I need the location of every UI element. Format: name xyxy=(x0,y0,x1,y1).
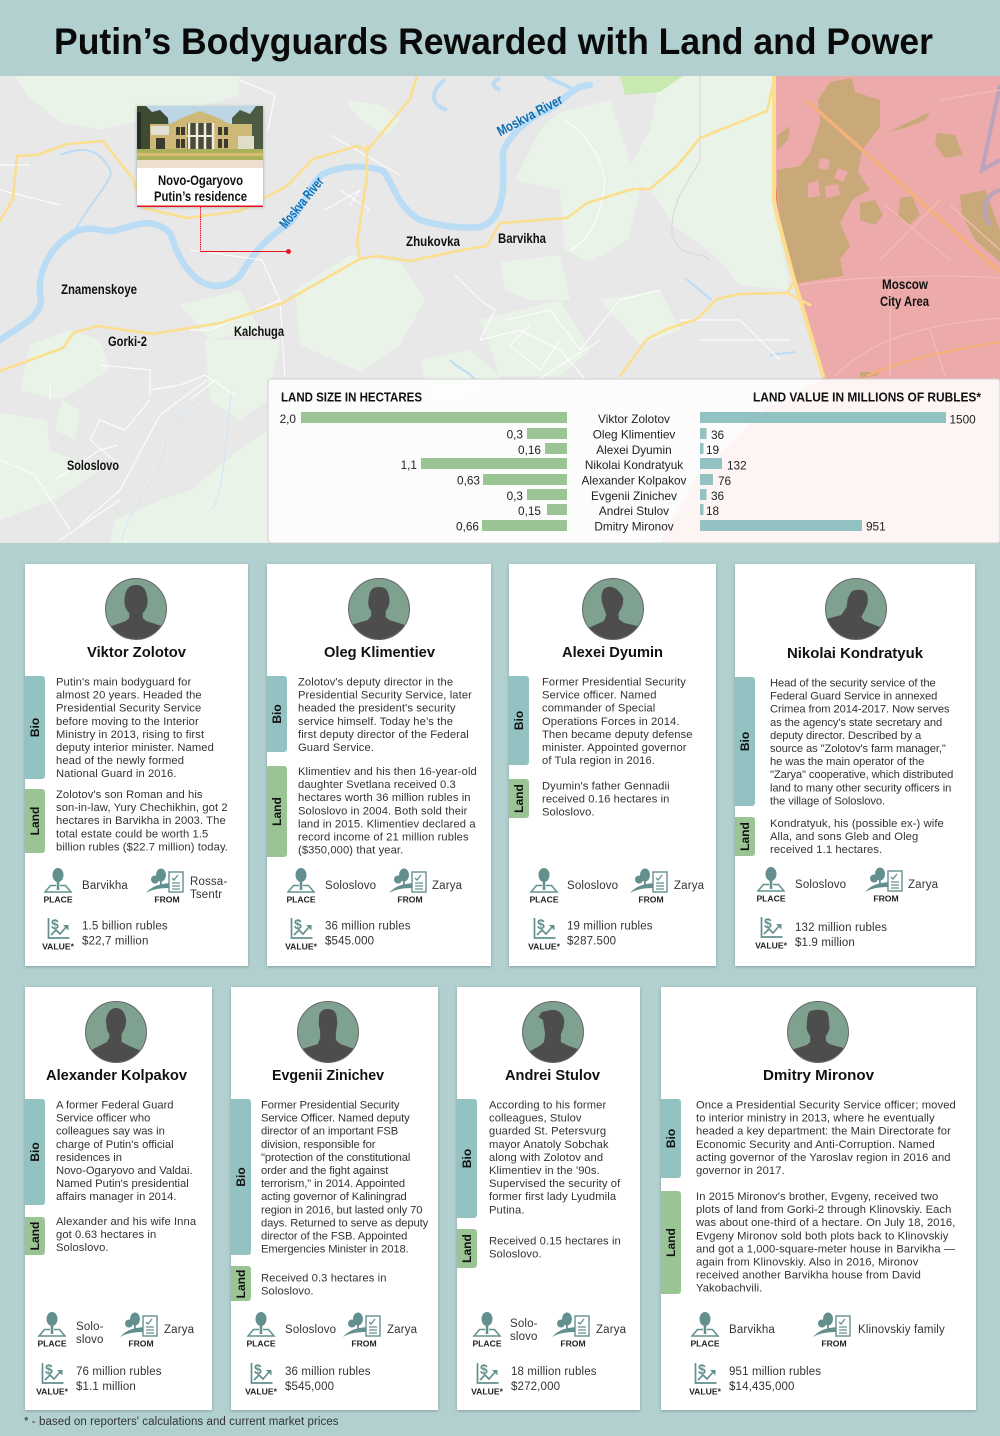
bio text: he was the main operator of the xyxy=(770,756,924,768)
bio text: affairs manager in 2014. xyxy=(56,1191,176,1203)
bio text: Service officer who xyxy=(56,1113,150,1125)
map: region around Novo-Ogaryovo and Moscow xyxy=(0,76,1000,543)
tab: land xyxy=(661,1191,681,1294)
icon: place: PLACE xyxy=(756,893,786,903)
bar chart: land size: 0,15 xyxy=(518,504,541,518)
land text: was about one-third of a hectare. On July 18, 2016, xyxy=(695,1217,955,1229)
place text: slovo xyxy=(76,1334,104,1346)
tab: bio: Bio xyxy=(270,704,284,724)
bio text: Guard Service. xyxy=(298,742,374,754)
bio text: Supervised the security of xyxy=(489,1178,621,1190)
icon: from xyxy=(389,868,426,904)
land text: and got a 1,000-square-meter house in Barvikha — xyxy=(696,1243,956,1255)
bar chart: land size xyxy=(280,412,567,534)
tab: land: Land xyxy=(270,797,284,826)
bar chart: land size: 0,63 xyxy=(457,474,480,488)
icon: value xyxy=(471,1361,504,1396)
bio text: Crimea from 2014-2017. Now serves xyxy=(770,704,950,716)
bio text: days. Returned to serve as deputy xyxy=(261,1217,429,1229)
icon: place xyxy=(529,868,559,904)
tab: bio: Bio xyxy=(28,1142,42,1162)
map place labels: City Area xyxy=(880,293,929,309)
icon: place: PLACE xyxy=(472,1338,502,1348)
map place labels: Soloslovo xyxy=(67,457,119,473)
icon: place: PLACE xyxy=(43,894,73,904)
bio text: Economic Security and Anti-Corruption. Named xyxy=(696,1139,935,1151)
panel: Oleg Klimentiev xyxy=(267,564,491,966)
land text: Alexander and his wife Inna xyxy=(56,1216,197,1228)
land text: hectares in Barvikha in 2003. The xyxy=(56,815,226,827)
tab: land xyxy=(267,766,287,857)
bio text: Service officer. Named xyxy=(542,690,657,702)
panel: Alexei Dyumin xyxy=(509,564,716,966)
icon: value: VALUE* xyxy=(471,1386,504,1396)
bar chart: land value: 1500 xyxy=(950,412,976,426)
icon: place xyxy=(37,1312,67,1348)
icon: from xyxy=(120,1312,157,1348)
names list: Oleg Klimentiev xyxy=(593,428,675,442)
bio text: colleagues, Stulov xyxy=(489,1113,582,1125)
callout: Novo-Ogaryovo residence: Novo-Ogaryovo xyxy=(158,172,243,188)
land text: son-in-law, Yury Chechikhin, got 2 xyxy=(56,802,228,814)
icon: from: FROM xyxy=(351,1338,377,1348)
icon: from: FROM xyxy=(560,1338,586,1348)
place text: Barvikha xyxy=(82,880,128,892)
tab: bio xyxy=(661,1099,681,1178)
bio text: Then became deputy defense xyxy=(542,729,693,741)
bio text: "Zarya" cooperative, which distributed xyxy=(770,769,953,781)
land text: got 0.63 hectares in xyxy=(56,1229,156,1241)
icon: value: VALUE* xyxy=(528,941,561,951)
bio text: "protection of the constitutional xyxy=(261,1152,410,1164)
tab: land xyxy=(231,1266,251,1301)
tab: land xyxy=(509,779,529,818)
panel: Viktor Zolotov xyxy=(25,564,248,966)
tab: bio: Bio xyxy=(738,732,752,751)
icon: from xyxy=(146,868,183,904)
name: Andrei Stulov xyxy=(505,1068,600,1084)
bar chart: land value: 951 xyxy=(866,520,886,534)
bio text: as the agency's state secretary and xyxy=(770,717,942,729)
panel: Dmitry Mironov xyxy=(661,987,976,1410)
tab: land: Land xyxy=(460,1234,474,1263)
tab: land: Land xyxy=(28,1222,42,1250)
land text: again from Klinovskiy. Also in 2016, Mironov xyxy=(696,1256,919,1268)
icon: place: PLACE xyxy=(690,1338,720,1348)
icon: from xyxy=(343,1312,380,1348)
title: Putin’s Bodyguards Rewarded with Land and Power xyxy=(54,21,933,62)
map place labels: Barvikha xyxy=(498,230,546,246)
bio text: commander of Special xyxy=(542,703,655,715)
land text: total estate could be worth 1.5 xyxy=(56,828,208,840)
value text: $1.9 million xyxy=(795,937,855,949)
land text: Soloslovo. xyxy=(542,807,595,819)
from text: Rossa- xyxy=(190,876,227,888)
bar chart: land size: 0,3 xyxy=(507,489,523,503)
tab: bio xyxy=(509,676,529,765)
bio text: former first lady Lyudmila xyxy=(489,1191,617,1203)
tab: land: Land xyxy=(664,1228,678,1257)
names list: Alexei Dyumin xyxy=(596,443,672,457)
icon: from: FROM xyxy=(397,894,423,904)
from text: Zarya xyxy=(164,1324,195,1336)
value text: $545,000 xyxy=(285,1381,334,1393)
name: Dmitry Mironov xyxy=(763,1068,874,1084)
map place labels: Moscow xyxy=(882,276,928,292)
land text: Alla, and sons Gleb and Oleg xyxy=(770,831,918,843)
name: Nikolai Kondratyuk xyxy=(787,646,924,662)
place text: Solo- xyxy=(510,1318,538,1330)
bar chart: land size: 2,0 xyxy=(280,412,296,426)
portrait xyxy=(86,1002,146,1064)
icon: value xyxy=(36,1361,69,1396)
portrait xyxy=(788,1002,848,1064)
bio text: Once a Presidential Security Service officer; moved xyxy=(696,1100,956,1112)
bio text: acting governor of Kaliningrad xyxy=(261,1191,407,1203)
river label: Moskva River (west): Moskva River xyxy=(276,173,327,231)
icon: value: VALUE* xyxy=(36,1386,69,1396)
bio text: headed a key department: the Main Directorate for xyxy=(696,1126,951,1138)
icon: value xyxy=(689,1361,722,1396)
tab: land: Land xyxy=(234,1270,248,1298)
bio text: Service Officer. Named deputy xyxy=(261,1113,410,1125)
from text: Zarya xyxy=(596,1324,627,1336)
tab: bio: Bio xyxy=(460,1149,474,1168)
bio text: division, responsible for xyxy=(261,1139,376,1151)
bio text: Operations Forces in 2014. xyxy=(542,716,680,728)
tab: bio: Bio xyxy=(512,711,526,730)
land text: ($350,000) that year. xyxy=(298,845,403,857)
land text: Soloslovo. xyxy=(56,1242,109,1254)
tab: bio xyxy=(457,1099,477,1218)
bio text: charge of Putin's official xyxy=(56,1139,174,1151)
bio text: colleagues say was in xyxy=(56,1126,165,1138)
name: Alexander Kolpakov xyxy=(46,1068,187,1084)
land text: Soloslovo in 2004. Both sold their xyxy=(298,805,468,817)
map place labels: Zhukovka xyxy=(406,233,460,249)
tab: land: Land xyxy=(512,784,526,813)
land text: Received 0.3 hectares in xyxy=(261,1272,387,1284)
bio text: director of an important FSB xyxy=(261,1126,398,1138)
heading: land size: LAND SIZE IN HECTARES xyxy=(281,390,422,404)
value text: $1.1 million xyxy=(76,1381,136,1393)
bio text: mayor Anatoly Sobchak xyxy=(489,1139,609,1151)
land text: Yakobachvili. xyxy=(696,1283,762,1295)
bio text: deputy interior minister. Named xyxy=(56,742,214,754)
land text: billion rubles ($22.7 million) today. xyxy=(56,841,228,853)
tab: bio: Bio xyxy=(234,1167,248,1187)
bio text: Former Presidential Security xyxy=(542,676,686,688)
bio text: along with Zolotov and xyxy=(489,1152,603,1164)
names list: Viktor Zolotov xyxy=(598,412,670,426)
bio text: Putina. xyxy=(489,1204,525,1216)
name: Evgenii Zinichev xyxy=(272,1068,384,1084)
bio text: Klimentiev in the '90s. xyxy=(489,1165,600,1177)
bio text: region in 2016, but lasted only 70 xyxy=(261,1204,422,1216)
tab: bio: Bio xyxy=(28,718,42,737)
bio text: National Guard in 2016. xyxy=(56,768,176,780)
bio text: the village of Soloslovo. xyxy=(770,795,885,807)
icon: value xyxy=(285,916,318,951)
tab: land xyxy=(735,817,755,856)
value text: 19 million rubles xyxy=(567,920,653,932)
icon: value: VALUE* xyxy=(689,1386,722,1396)
land text: Kondratyuk, his (possible ex-) wife xyxy=(770,818,944,830)
land text: daughter Svetlana received 0.3 xyxy=(298,779,456,791)
from text: Zarya xyxy=(674,880,705,892)
from text: Zarya xyxy=(432,880,463,892)
icon: place xyxy=(246,1312,276,1348)
photo of residence xyxy=(137,106,263,168)
panel: Andrei Stulov xyxy=(457,987,640,1410)
callout: Novo-Ogaryovo residence: Putin’s residence xyxy=(154,188,247,204)
bar chart: land value: 19 xyxy=(706,443,719,457)
bio text: Novo-Ogaryovo and Valdai. xyxy=(56,1165,193,1177)
bio text: According to his former xyxy=(489,1100,607,1112)
tab: bio: Bio xyxy=(664,1129,678,1148)
icon: from xyxy=(865,868,902,903)
icon: value: VALUE* xyxy=(42,941,75,951)
icon: value xyxy=(755,915,788,950)
names list: Andrei Stulov xyxy=(599,504,669,518)
icon: from xyxy=(630,868,667,904)
value text: 36 million rubles xyxy=(285,1366,371,1378)
bio text: order and the fight against xyxy=(261,1165,389,1177)
icon: from: FROM xyxy=(873,893,899,903)
icon: place: PLACE xyxy=(529,894,559,904)
names list: Alexander Kolpakov xyxy=(582,474,687,488)
land text: Soloslovo. xyxy=(261,1286,314,1298)
land text: Dyumin's father Gennadii xyxy=(542,780,670,792)
bio text: headed the president's security xyxy=(298,703,456,715)
value text: $287.500 xyxy=(567,936,616,948)
map place labels: Gorki-2 xyxy=(108,333,147,349)
bio text: terrorism," in 2014. Appointed xyxy=(261,1178,405,1190)
icon: value xyxy=(245,1361,278,1396)
value text: 951 million rubles xyxy=(729,1366,821,1378)
name: Alexei Dyumin xyxy=(562,645,663,661)
bio text: minister. Appointed governor xyxy=(542,742,687,754)
bar chart: land value: 132 xyxy=(727,458,747,472)
icon: place xyxy=(690,1312,720,1348)
bio text: Former Presidential Security xyxy=(261,1100,400,1112)
tab: land xyxy=(457,1229,477,1268)
bio text: Head of the security service of the xyxy=(770,678,936,690)
names list: Nikolai Kondratyuk xyxy=(585,458,683,472)
map place labels xyxy=(61,230,929,473)
value text: 18 million rubles xyxy=(511,1366,597,1378)
map place labels: Znamenskoye xyxy=(61,281,137,297)
land text: received another Barvikha house from David xyxy=(696,1270,921,1282)
value text: 36 million rubles xyxy=(325,920,411,932)
tab: bio xyxy=(735,677,755,806)
land text: Soloslovo. xyxy=(489,1249,542,1261)
bar chart: land value: 76 xyxy=(718,474,732,488)
land text: plots of land from Gorki-2 through Klinovskiy. Each xyxy=(696,1204,951,1216)
panel: land size and value charts xyxy=(268,379,1000,543)
tab: bio xyxy=(231,1099,251,1255)
bio text: before moving to the Interior xyxy=(56,716,199,728)
land text: In 2015 Mironov's brother, Evgeny, received two xyxy=(696,1191,938,1203)
bio text: head of the newly formed xyxy=(56,755,184,767)
land text: received 0.16 hectares in xyxy=(542,794,670,806)
bio text: governor in 2017. xyxy=(696,1165,785,1177)
tab: land: Land xyxy=(28,807,42,835)
tab: land xyxy=(25,789,45,853)
minor roads xyxy=(0,80,790,540)
land text: Zolotov's son Roman and his xyxy=(56,789,203,801)
tab: bio xyxy=(25,1099,45,1205)
bio text: source as "Zolotov's farm manager," xyxy=(770,743,946,755)
map place labels: Kalchuga xyxy=(234,323,284,339)
bio text: Presidential Security Service, later xyxy=(298,690,472,702)
Moscow city area xyxy=(776,76,1000,543)
land text: hectares worth 36 million rubles in xyxy=(298,792,471,804)
tab: bio xyxy=(25,676,45,779)
land text: Evgeny Mironov sold both plots back to Klinovskiy xyxy=(696,1230,949,1242)
bio text: to interior ministry in 2013, where he eventually xyxy=(696,1113,935,1125)
land text: land in 2015. Klimentiev declared a xyxy=(298,818,476,830)
heading: land value: LAND VALUE IN MILLIONS OF RUBLES* xyxy=(753,390,981,404)
names list: Evgenii Zinichev xyxy=(591,489,677,503)
bar chart: land size: 0,3 xyxy=(507,428,523,442)
tab: bio xyxy=(267,676,287,752)
icon: place xyxy=(43,868,73,904)
icon: value xyxy=(42,916,75,951)
icon: value xyxy=(528,916,561,951)
bio text: acting governor of the Yaroslav region in 2016 and xyxy=(696,1152,951,1164)
bio text: director of the FSB. Appointed xyxy=(261,1230,407,1242)
icon: from: FROM xyxy=(154,894,180,904)
place text: Barvikha xyxy=(729,1324,775,1336)
icon: place xyxy=(472,1312,502,1348)
portrait xyxy=(826,578,886,641)
bar chart: land size: 0,16 xyxy=(518,443,541,457)
names list: Dmitry Mironov xyxy=(594,520,674,534)
value text: 132 million rubles xyxy=(795,922,887,934)
panel: Alexander Kolpakov xyxy=(25,987,212,1410)
river xyxy=(0,85,590,340)
portrait xyxy=(522,1002,584,1064)
value text: $272,000 xyxy=(511,1381,560,1393)
icon: place: PLACE xyxy=(37,1338,67,1348)
panel: Nikolai Kondratyuk xyxy=(735,564,975,966)
bio text: Named Putin's presidential xyxy=(56,1178,189,1190)
bio text: Presidential Security Service xyxy=(56,703,201,715)
icon: value: VALUE* xyxy=(245,1386,278,1396)
portrait xyxy=(298,1002,358,1064)
from text: Zarya xyxy=(387,1324,418,1336)
bar chart: land value: 36 xyxy=(711,489,725,503)
bio text: almost 20 years. Headed the xyxy=(56,690,202,702)
bio text: first deputy director of the Federal xyxy=(298,729,469,741)
name: Oleg Klimentiev xyxy=(324,645,435,661)
land text: Received 0.15 hectares in xyxy=(489,1236,621,1248)
name: Viktor Zolotov xyxy=(87,645,186,661)
icon: from: FROM xyxy=(821,1338,847,1348)
place text: Solo- xyxy=(76,1321,104,1333)
place text: slovo xyxy=(510,1331,538,1343)
portrait xyxy=(106,578,166,641)
bio text: service himself. Today he’s the xyxy=(298,716,453,728)
icon: from xyxy=(813,1312,850,1348)
value text: 76 million rubles xyxy=(76,1366,162,1378)
portrait xyxy=(348,578,410,641)
bar chart: land value: 36 xyxy=(711,428,725,442)
bio text: residences in xyxy=(56,1152,122,1164)
icon: place: PLACE xyxy=(286,894,316,904)
callout: Novo-Ogaryovo residence xyxy=(137,106,291,254)
icon: from xyxy=(552,1312,589,1348)
icon: from: FROM xyxy=(128,1338,154,1348)
bio text: guarded St. Petersvurg xyxy=(489,1126,606,1138)
icon: value: VALUE* xyxy=(285,941,318,951)
tab: land xyxy=(25,1217,45,1255)
value text: 1.5 billion rubles xyxy=(82,920,168,932)
panel: Evgenii Zinichev xyxy=(231,987,438,1410)
land text: record income of 21 million rubles xyxy=(298,832,469,844)
main roads xyxy=(0,76,823,376)
river label: Moskva River (north): Moskva River xyxy=(494,91,565,139)
footnote: * - based on reporters' calculations and current market prices xyxy=(24,1416,339,1428)
portrait xyxy=(582,578,644,641)
value text: $22,7 million xyxy=(82,936,149,948)
bio text: of Tula region in 2016. xyxy=(542,755,655,767)
land text: Klimentiev and his then 16-year-old xyxy=(298,766,477,778)
value text: $545.000 xyxy=(325,936,374,948)
icon: place xyxy=(756,867,786,903)
bio text: Ministry in 2013, rising to first xyxy=(56,729,205,741)
place text: Soloslovo xyxy=(795,879,846,891)
from text: Tsentr xyxy=(190,889,222,901)
place text: Soloslovo xyxy=(285,1324,336,1336)
from text: Zarya xyxy=(908,879,939,891)
tab: land: Land xyxy=(738,822,752,851)
value text: $14,435,000 xyxy=(729,1381,795,1393)
bar chart: land size: 0,66 xyxy=(456,520,479,534)
bio text: A former Federal Guard xyxy=(56,1100,174,1112)
icon: place xyxy=(286,868,316,904)
land text: received 1.1 hectares. xyxy=(770,844,882,856)
bar chart: land value: 18 xyxy=(706,504,720,518)
bio text: deputy director. Described by a xyxy=(770,730,922,742)
icon: from: FROM xyxy=(638,894,664,904)
bar chart: land size: 1,1 xyxy=(401,458,417,472)
icon: value: VALUE* xyxy=(755,940,788,950)
bio text: Putin's main bodyguard for xyxy=(56,676,192,688)
from text: Klinovskiy family xyxy=(858,1324,945,1336)
bio text: Federal Guard Service in annexed xyxy=(770,691,937,703)
place text: Soloslovo xyxy=(567,880,618,892)
bio text: Zolotov's deputy director in the xyxy=(298,676,453,688)
place text: Soloslovo xyxy=(325,880,376,892)
names list xyxy=(582,412,687,534)
bio text: land to many other security officers in xyxy=(770,782,951,794)
icon: place: PLACE xyxy=(246,1338,276,1348)
bio text: Emergencies Minister in 2018. xyxy=(261,1244,409,1256)
bar chart: land value xyxy=(700,412,976,534)
